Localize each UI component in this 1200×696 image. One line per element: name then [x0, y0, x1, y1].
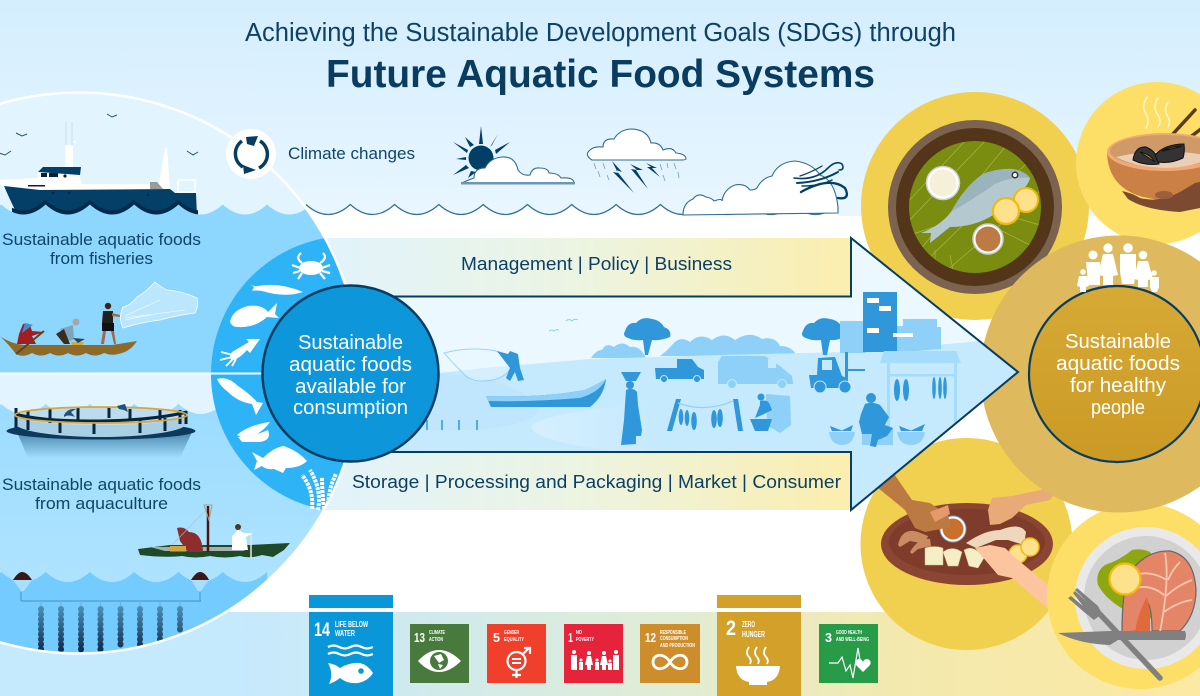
shrimp [898, 531, 931, 554]
fisheries label: from fisheries [50, 250, 153, 268]
SDG tile 2: 2 [726, 617, 736, 640]
main arrow [300, 238, 1030, 520]
arrow top band [300, 238, 852, 296]
chopsticks [1171, 108, 1200, 136]
woman with basket [621, 372, 642, 445]
chutney bowls [926, 166, 1003, 254]
aquaculture label [2, 476, 201, 513]
arrow bottom band [300, 452, 852, 510]
central circle: aquatic foods [289, 354, 412, 376]
deep sea [0, 572, 268, 652]
bottom band label: Storage | Processing and Packaging | Market | Consumer [352, 472, 841, 492]
hands [878, 475, 1053, 608]
lettuce [1097, 549, 1151, 618]
SDG tile 5: GENDER [504, 630, 519, 636]
fisher 2 [56, 318, 85, 347]
dipping bowl [940, 516, 966, 542]
SDG tile 13 [410, 624, 469, 683]
lemon slice [1110, 564, 1140, 594]
icon: mussel [237, 422, 270, 442]
healthy people text: for healthy [1070, 375, 1166, 397]
top band label: Management | Policy | Business [461, 254, 732, 274]
bushes [591, 335, 797, 358]
icon: sun behind cloud [453, 126, 575, 184]
SDG tile 14: LIFE BELOW [335, 620, 368, 629]
seated man and bowls [829, 393, 925, 447]
panel: healthy people circle [980, 236, 1200, 512]
aquaculture label: Sustainable aquatic foods [2, 476, 201, 494]
central circle: Sustainable [298, 332, 403, 354]
hand [1122, 180, 1200, 212]
market stall [880, 351, 961, 433]
arrow outlines [380, 238, 1018, 510]
forklift [809, 352, 865, 393]
food circle: seafood platter [860, 438, 1072, 650]
salmon steak [1122, 551, 1196, 632]
ground [395, 341, 1016, 508]
food circle: fish on banana leaf [861, 92, 1089, 320]
central circle: available for [295, 376, 406, 398]
SDG tile 12: 12 [645, 630, 656, 645]
scallops [925, 546, 984, 568]
SDG tile 3: AND WELL-BEING [836, 637, 869, 643]
fishers boat [1, 282, 198, 356]
icon: family [1077, 243, 1159, 292]
value-chain scene [395, 292, 1016, 508]
title [245, 19, 956, 96]
fisheries label [2, 231, 201, 268]
icon: sea bream [230, 303, 279, 327]
SDG tile 3: GOOD HEALTH [836, 630, 862, 636]
steam [1144, 97, 1170, 128]
leaf veins [909, 142, 1040, 270]
pickup truck [655, 359, 704, 382]
SDG tile 2: HUNGER [742, 630, 765, 639]
lower sea [0, 404, 322, 582]
SDG tile 12: RESPONSIBLE [660, 630, 686, 636]
healthy people text: Sustainable [1065, 331, 1171, 353]
canoe [1, 337, 137, 356]
upper sea [0, 204, 356, 373]
icon: carp [252, 446, 307, 473]
sky inside circle [0, 90, 390, 220]
healthy people text [1056, 331, 1180, 419]
SDG tile 14: WATER [335, 629, 355, 638]
SDG tile 3: 3 [825, 630, 832, 645]
canoe [486, 379, 606, 407]
fisher 3 [101, 303, 120, 344]
healthy people text: people [1091, 397, 1145, 419]
SDG tile 1: POVERTY [576, 637, 594, 643]
woman with bowl [750, 394, 791, 433]
lower half background [0, 374, 216, 414]
SDG tile 5 [487, 624, 546, 683]
fishing vessel [0, 122, 198, 214]
SDG tile 5: EQUALITY [504, 637, 524, 643]
wave line [306, 204, 838, 214]
posts [427, 420, 477, 430]
SDG tile 2: ZERO [742, 620, 755, 629]
icon: seaweed [302, 470, 336, 510]
mussels [1133, 144, 1184, 164]
icon: squid [220, 339, 260, 366]
SDG tile 13: ACTION [429, 637, 443, 643]
icon: wind cloud [683, 161, 847, 215]
SDG tile 12: CONSUMPTION [660, 636, 688, 642]
lemon slices [1009, 538, 1039, 563]
food circle: salmon plate [1047, 503, 1200, 689]
bottom SDG band [0, 612, 1200, 696]
SDG tile 12 [640, 624, 700, 683]
SDG tile 1 [564, 624, 623, 683]
central circle [262, 286, 438, 462]
fish cage [6, 404, 196, 458]
SDG tile 12: AND PRODUCTION [660, 643, 695, 649]
panel: production circle [0, 91, 346, 655]
central circle: consumption [293, 397, 408, 419]
net thrower [444, 349, 524, 381]
climate clouds and wave line [306, 126, 847, 215]
trees [624, 318, 845, 355]
SDG tile 13: CLIMATE [429, 630, 445, 636]
title: Future Aquatic Food Systems [326, 53, 875, 96]
SDG tile 1: 1 [568, 630, 573, 645]
birds [0, 114, 198, 155]
squid [966, 526, 1026, 548]
fisher 1 [17, 323, 44, 344]
seaweed farming boat [138, 505, 290, 558]
lemon slices [993, 188, 1038, 224]
fish [921, 169, 1030, 243]
birds [549, 319, 578, 331]
SDG tile 3 [819, 624, 878, 683]
climate changes label: Climate changes [288, 144, 415, 163]
fish drying rack [667, 399, 743, 431]
icon: climate cycle [226, 129, 276, 179]
SDG tile 13: 13 [414, 631, 425, 645]
divider [0, 372, 270, 374]
seaweed lines and buoys [13, 572, 209, 652]
arrow body and head [340, 238, 1018, 510]
bowl [1107, 152, 1200, 200]
SDG tile 1: NO [576, 630, 582, 636]
food circle: mussel soup bowl [1076, 82, 1200, 244]
buildings [840, 292, 941, 353]
SDG tile 2 [717, 595, 801, 696]
fork and knife [1058, 588, 1186, 678]
van [718, 356, 793, 388]
icon: storm cloud [587, 129, 686, 193]
icon: slender fish [250, 284, 303, 295]
fan of aquatic foods [211, 236, 487, 512]
SDG tile 14: 14 [314, 620, 330, 641]
healthy people text: aquatic foods [1056, 353, 1180, 375]
aquaculture label: from aquaculture [35, 495, 168, 513]
icon: crab [292, 253, 330, 279]
SDG tile 14 [309, 595, 393, 696]
icon: salmon [217, 378, 263, 415]
SDG tile 5: 5 [493, 630, 500, 645]
fisheries label: Sustainable aquatic foods [2, 231, 201, 249]
title: Achieving the Sustainable Development Goals (SDGs) through [245, 19, 956, 47]
